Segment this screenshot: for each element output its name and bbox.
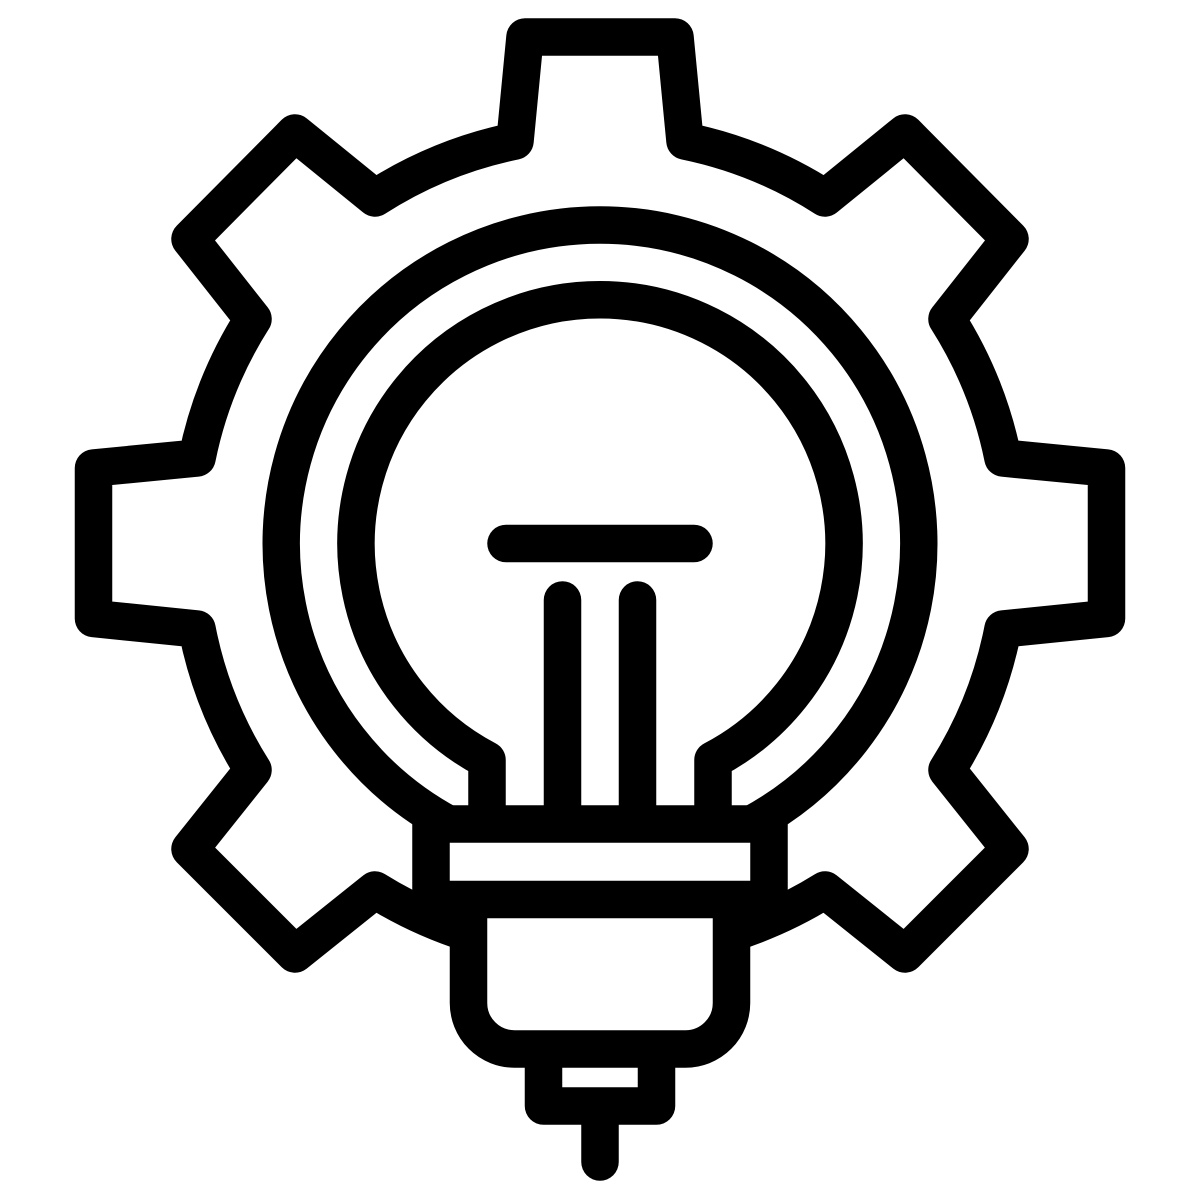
icon: filament supports [562, 600, 638, 810]
icon: socket tip [544, 1049, 656, 1106]
icon: contact pin [581, 1118, 619, 1162]
icon: inner bulb glass [356, 300, 844, 824]
icon: bulb collar [431, 824, 769, 900]
icon: gear outline [94, 37, 1106, 954]
icon: outer bulb glass [281, 225, 919, 825]
icon: filament bar [506, 525, 694, 562]
icon: bulb socket [468, 900, 732, 1049]
